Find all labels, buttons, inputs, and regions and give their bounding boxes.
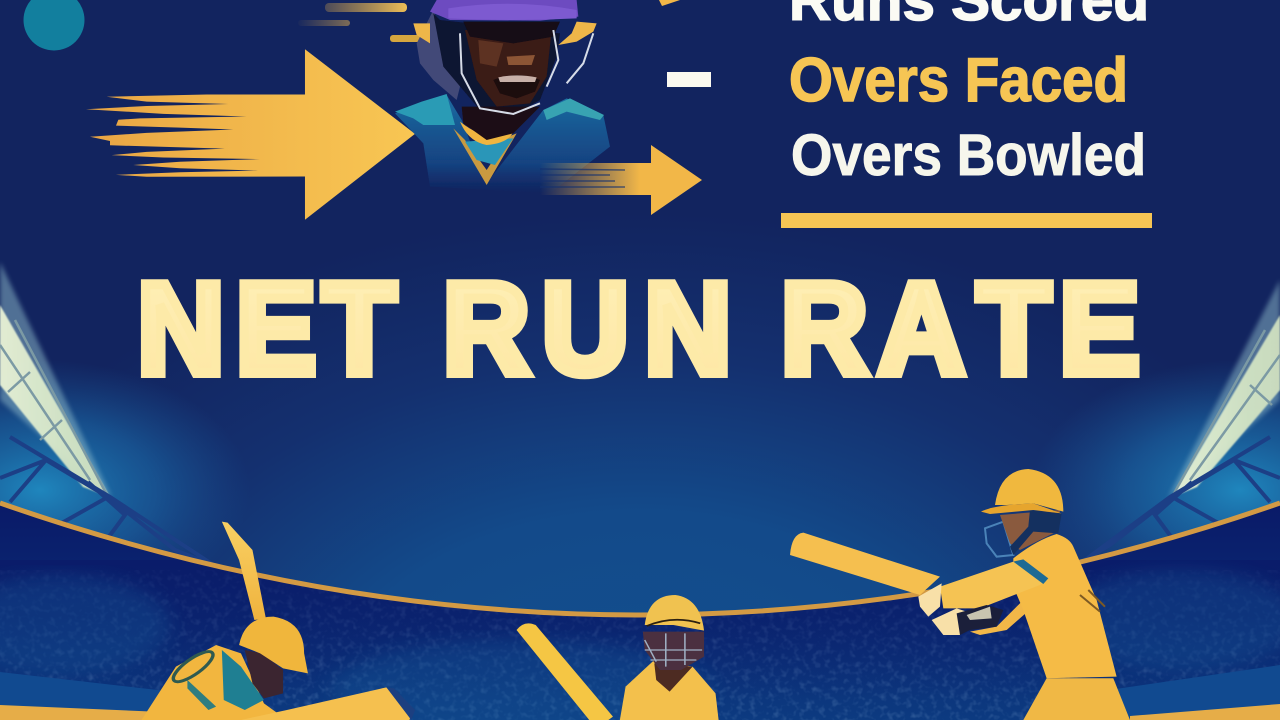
speed streaks: top (298, 3, 435, 42)
sleeve stripe (187, 680, 216, 710)
shirt (395, 95, 610, 193)
bat toe edge (386, 687, 415, 720)
floodlight: right (1085, 280, 1280, 560)
lip (498, 75, 537, 82)
yellow neckband (460, 122, 513, 145)
bat (790, 533, 940, 595)
decorative teal circle (24, 0, 84, 50)
overs bowled: Overs Bowled (791, 123, 1146, 188)
crouching batter (141, 522, 415, 720)
helmet straps (433, 13, 560, 115)
wrist highlight (967, 607, 992, 620)
shoulders and shirt (620, 660, 719, 720)
right shoulder (543, 98, 604, 120)
gold clips (413, 22, 597, 45)
body (141, 645, 287, 720)
helmet strap (1010, 510, 1062, 555)
face (1000, 510, 1060, 550)
neck and chest (654, 663, 693, 692)
helmet brim (981, 503, 1062, 514)
wrist guard (957, 605, 1003, 635)
cage lines (645, 633, 702, 667)
helmet band (647, 620, 700, 626)
forearm and bat (241, 687, 413, 720)
forehead shadow (463, 22, 560, 43)
cheek highlight (478, 40, 503, 67)
trousers (1023, 678, 1130, 720)
face mask (643, 632, 704, 670)
minus sign (667, 72, 711, 87)
face (245, 650, 283, 698)
gloves (918, 583, 967, 635)
helmet back (417, 10, 460, 100)
collar (453, 128, 517, 185)
floodlight: left (0, 262, 215, 566)
sleeve badge (169, 647, 218, 686)
lead arm (940, 562, 1048, 608)
face (465, 30, 552, 107)
purple cap (430, 0, 578, 21)
left shoulder (395, 94, 455, 125)
batsman portrait (395, 0, 610, 193)
sleeve band (1013, 559, 1048, 584)
helmet (239, 617, 308, 673)
small arrow tip: top (659, 0, 680, 6)
raised bat (222, 522, 266, 620)
helmet (645, 595, 704, 631)
helmet (995, 469, 1063, 512)
middle batter (517, 595, 719, 720)
gold boundary curve (0, 503, 1280, 615)
cage wires (460, 30, 593, 114)
moustache and mouth (493, 75, 540, 98)
cap peak (448, 4, 577, 20)
big speed arrow (86, 49, 415, 220)
bat (517, 623, 613, 720)
back arm (970, 600, 1033, 635)
helmet grille (985, 522, 1013, 557)
torso (1013, 534, 1117, 678)
small speed arrow (540, 145, 702, 215)
nose highlight (507, 55, 535, 65)
stadium stands with crowd (0, 503, 1280, 720)
overs faced: Overs Faced (789, 46, 1128, 115)
fraction bar (781, 213, 1152, 228)
title: net run rate: NET RUN RATE (138, 257, 1140, 401)
undershirt (465, 138, 513, 165)
right batter (790, 469, 1130, 720)
teal collar panel (222, 650, 264, 710)
formula text (781, 0, 1152, 228)
jersey fold marks (1080, 590, 1105, 612)
neck (462, 107, 540, 140)
